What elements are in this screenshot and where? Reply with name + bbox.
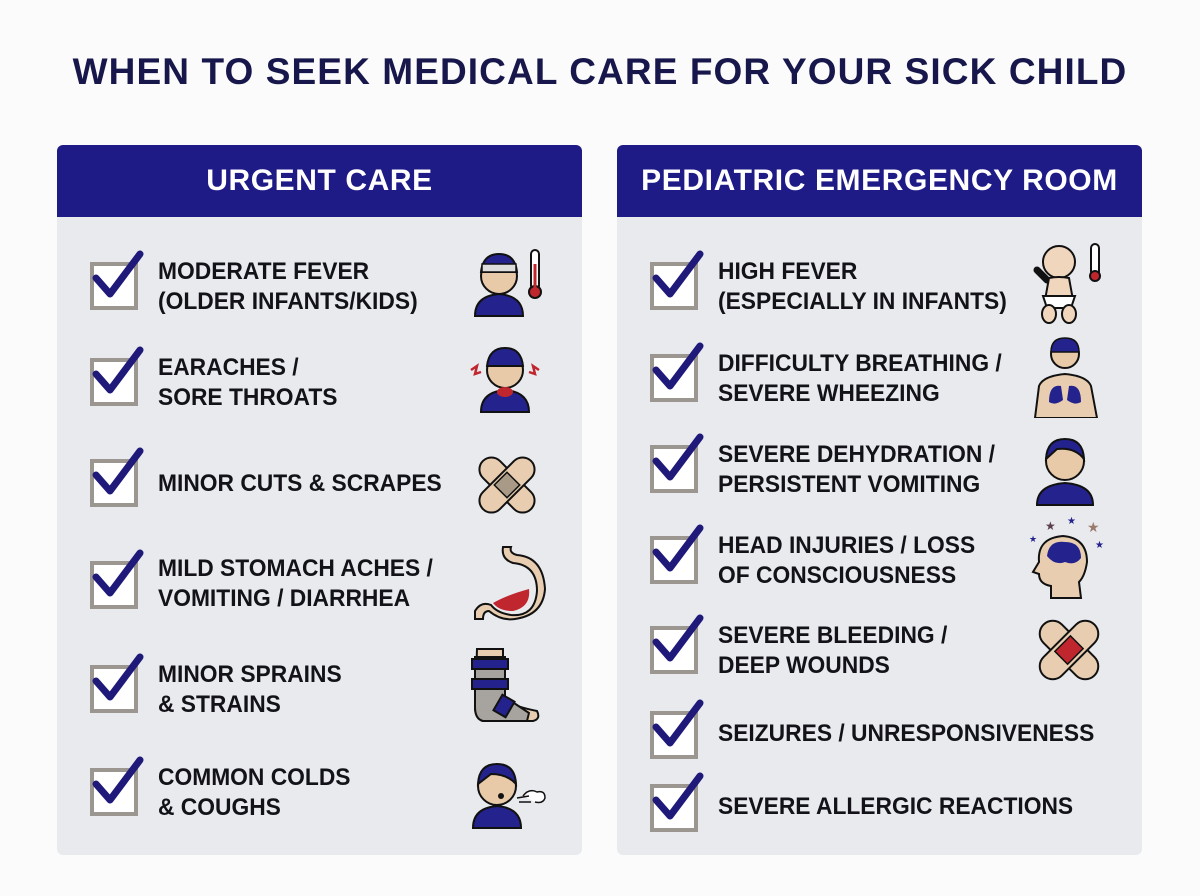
item: stomach aches: MILD STOMACH ACHES / xyxy=(158,555,433,582)
item: bleeding xyxy=(650,614,1100,680)
item: bleeding: DEEP WOUNDS xyxy=(718,652,890,679)
panel: pediatric emergency room: ★ xyxy=(1067,516,1076,527)
heading: pediatric ER xyxy=(617,145,1142,217)
item: high fever: (ESPECIALLY IN INFANTS) xyxy=(718,288,1007,315)
item: head injuries: HEAD INJURIES / LOSS xyxy=(718,532,975,559)
item: breathing: DIFFICULTY BREATHING / xyxy=(718,350,1002,377)
item: earaches: EARACHES / xyxy=(158,354,299,381)
heading: urgent care: URGENT CARE xyxy=(206,164,433,197)
item: sprains: MINOR SPRAINS xyxy=(158,661,342,688)
item: dehydration xyxy=(650,434,1094,506)
item: head injuries: ★ xyxy=(1087,519,1100,535)
item: head injuries: ★ xyxy=(1095,540,1104,551)
item: dehydration: PERSISTENT VOMITING xyxy=(718,471,980,498)
item: sprains: & STRAINS xyxy=(158,691,281,718)
item: high fever xyxy=(650,243,1101,324)
item: moderate fever: (OLDER INFANTS/KIDS) xyxy=(158,288,418,315)
panel: urgent care xyxy=(57,145,582,855)
item: seizures xyxy=(650,700,1094,759)
heading: urgent care xyxy=(57,145,582,217)
item: earaches xyxy=(90,346,540,413)
item: sprains xyxy=(90,648,540,722)
item: colds: COMMON COLDS xyxy=(158,764,351,791)
heading: pediatric ER: PEDIATRIC EMERGENCY ROOM xyxy=(641,164,1118,197)
item: head injuries: ★ xyxy=(1045,519,1056,533)
item: head injuries: OF CONSCIOUSNESS xyxy=(718,562,956,589)
item: allergic reactions: SEVERE ALLERGIC REACTIONS xyxy=(718,793,1073,820)
item: moderate fever: MODERATE FEVER xyxy=(158,258,369,285)
item: minor cuts xyxy=(90,448,536,514)
item: minor cuts: MINOR CUTS & SCRAPES xyxy=(158,470,442,497)
item: allergic reactions xyxy=(650,772,1073,832)
item: colds: & COUGHS xyxy=(158,794,281,821)
item: head injuries xyxy=(650,516,1104,599)
item: stomach aches xyxy=(90,546,546,620)
item: colds xyxy=(90,756,546,829)
title: WHEN TO SEEK MEDICAL CARE FOR YOUR SICK CHILD xyxy=(73,51,1127,92)
item: seizures: SEIZURES / UNRESPONSIVENESS xyxy=(718,720,1094,747)
item: earaches: SORE THROATS xyxy=(158,384,337,411)
panel: pediatric emergency room xyxy=(617,145,1142,855)
item: stomach aches: VOMITING / DIARRHEA xyxy=(158,585,410,612)
item: breathing xyxy=(650,337,1098,418)
item: moderate fever xyxy=(90,249,542,317)
item: high fever: HIGH FEVER xyxy=(718,258,857,285)
item: breathing: SEVERE WHEEZING xyxy=(718,380,940,407)
item: dehydration: SEVERE DEHYDRATION / xyxy=(718,441,995,468)
item: head injuries: ★ xyxy=(1029,534,1037,544)
item: bleeding: SEVERE BLEEDING / xyxy=(718,622,947,649)
